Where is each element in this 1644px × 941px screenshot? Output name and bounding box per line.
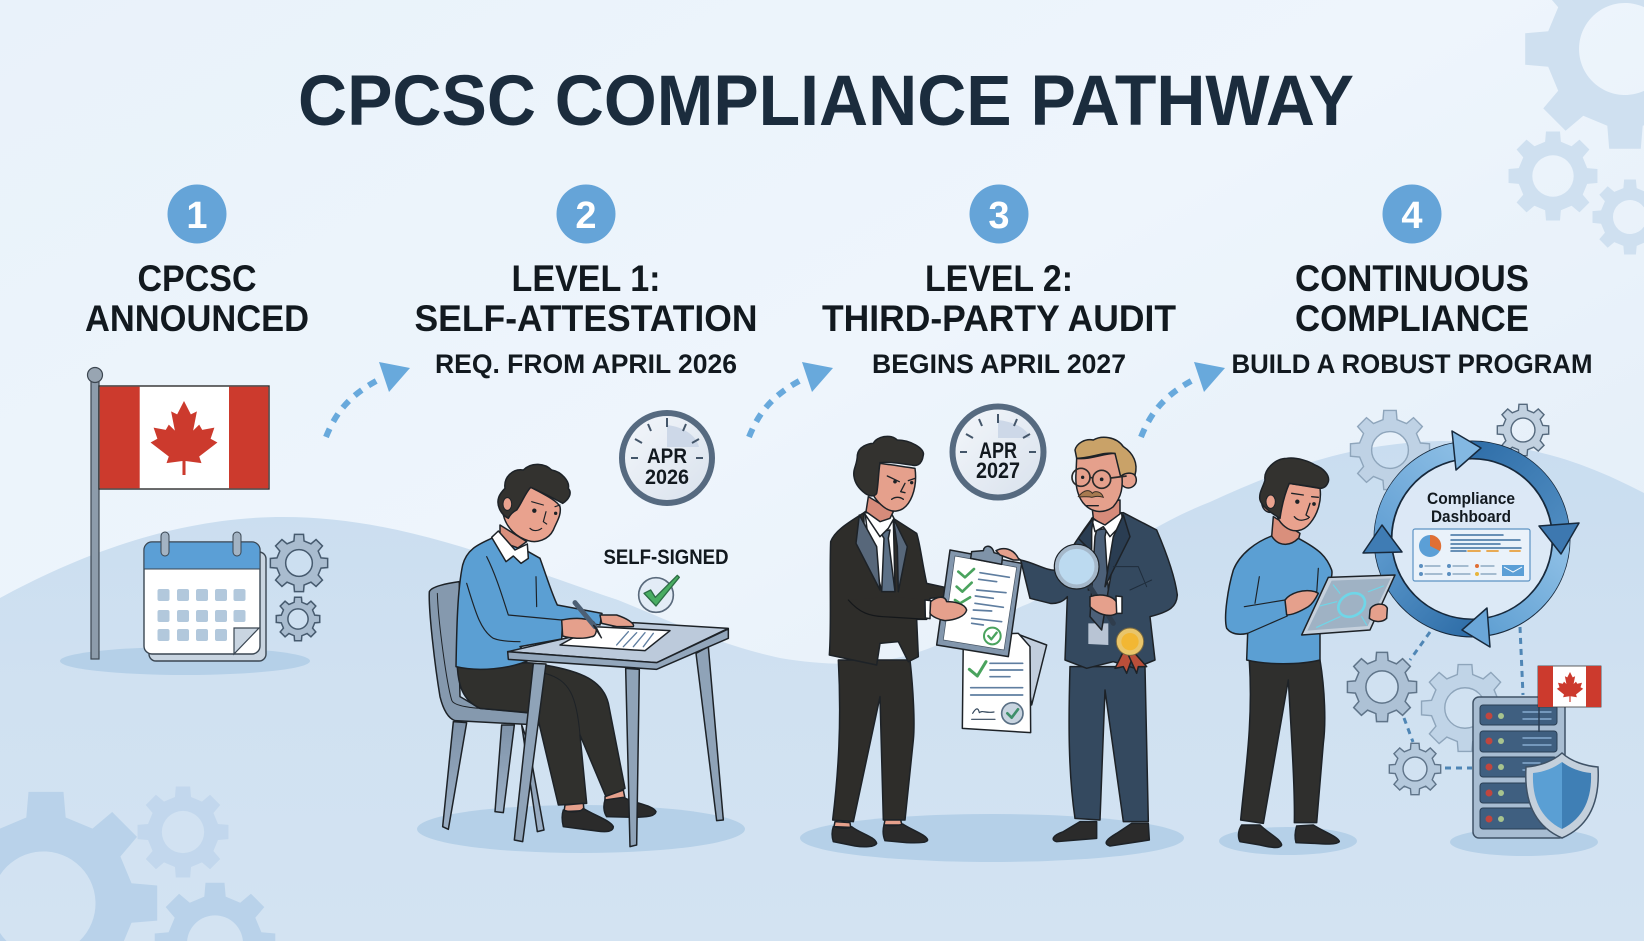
- signed document: [962, 633, 1047, 733]
- desk: [508, 623, 728, 847]
- auditor in navy suit: [1021, 437, 1177, 846]
- arrow: step 3 to step 4: [1141, 362, 1225, 437]
- panel: step 1 CPCSC announced: [60, 184, 328, 675]
- background gears: top right: [1509, 0, 1644, 254]
- panel: step 4 continuous compliance: [1219, 184, 1601, 856]
- icon: shield: [1526, 753, 1598, 838]
- compliance cycle arrows: [1363, 431, 1579, 647]
- label: compliance dashboard: Dashboard: [1431, 508, 1511, 526]
- step number 4: [1382, 184, 1442, 244]
- icon: clock April 2026: [622, 413, 712, 503]
- heading: level 1 self-attestation: SELF-ATTESTATION: [414, 298, 758, 339]
- background gears: bottom left: [0, 787, 275, 941]
- panel: step 3 third-party audit: [800, 184, 1184, 862]
- illustration: person signing at desk: [429, 464, 728, 847]
- icon: check mark: [639, 575, 679, 612]
- label: compliance dashboard: [1427, 490, 1515, 526]
- heading: level 2 third-party audit: THIRD-PARTY AUDIT: [822, 298, 1176, 339]
- tablet: [1302, 575, 1395, 635]
- heading: continuous compliance: COMPLIANCE: [1295, 298, 1529, 339]
- illustration: person with tablet: [1226, 458, 1395, 848]
- arrow: step 1 to step 2: [326, 362, 410, 437]
- icon: clock April 2027: 2027: [976, 458, 1020, 483]
- dashed connectors: [1404, 627, 1523, 768]
- title: CPCSC COMPLIANCE PATHWAY: [298, 62, 1354, 141]
- magnifier and hand: [1054, 544, 1122, 623]
- heading: continuous compliance: CONTINUOUS: [1295, 258, 1529, 299]
- pants: [1241, 660, 1325, 823]
- illustration: employee, auditor and documents: [829, 436, 1177, 847]
- heading: level 2 third-party audit: LEVEL 2:: [925, 258, 1073, 299]
- icon: clock April 2026: 2026: [645, 466, 689, 489]
- sweater: [456, 538, 602, 669]
- hands and pen: [562, 603, 634, 638]
- shadows under person and server: [1219, 827, 1598, 856]
- step number 3: 3: [988, 195, 1010, 237]
- hands holding clipboard: [925, 549, 1021, 621]
- employee in black suit: [829, 436, 945, 847]
- step number 2: [556, 184, 616, 244]
- server rack: [1473, 697, 1565, 838]
- icon: Canadian flag on server: [1538, 666, 1601, 732]
- shadow under flag and calendar: [60, 647, 310, 675]
- chair legs: [443, 722, 544, 832]
- ribbon badge: [1115, 628, 1147, 673]
- arrow: step 2 to step 3: [749, 362, 833, 437]
- shoes: [1238, 825, 1339, 848]
- gears behind cycle: [1347, 404, 1549, 795]
- icon: clock April 2027: APR: [979, 438, 1017, 463]
- background wave: [0, 441, 1644, 941]
- icon: calendar: [144, 532, 266, 661]
- heading: level 1 self-attestation: [414, 258, 758, 339]
- panel: step 2 self-attestation: [414, 184, 758, 853]
- head: [1260, 458, 1329, 531]
- shoes: [562, 790, 656, 832]
- pants: [457, 663, 625, 805]
- subheading: required from April 2026: REQ. FROM APRIL 2026: [435, 349, 737, 379]
- step number 3: [970, 184, 1028, 244]
- icon: clock April 2026: APR: [647, 445, 687, 468]
- heading: CPCSC announced: ANNOUNCED: [85, 298, 309, 339]
- heading: CPCSC announced: CPCSC: [138, 258, 256, 299]
- subheading: begins April 2027: BEGINS APRIL 2027: [872, 349, 1126, 379]
- label: self-signed: SELF-SIGNED: [604, 546, 728, 569]
- icon: clock April 2027: [952, 406, 1044, 498]
- heading: CPCSC announced: [85, 258, 309, 339]
- subheading: build a robust program: BUILD A ROBUST PROGRAM: [1232, 349, 1592, 379]
- clipboard checklist: [937, 546, 1022, 657]
- step number 4: 4: [1401, 195, 1423, 237]
- heading: level 2 third-party audit: [822, 258, 1176, 339]
- label: compliance dashboard: Compliance: [1427, 490, 1515, 508]
- head: [498, 464, 570, 542]
- shadow under auditors: [800, 814, 1184, 862]
- heading: level 1 self-attestation: LEVEL 1:: [512, 258, 660, 299]
- icon: small gears by calendar: [270, 534, 328, 641]
- dashboard panel: [1413, 529, 1530, 581]
- neck: [500, 525, 527, 550]
- paper: [560, 627, 670, 651]
- step number 2: 2: [575, 195, 597, 237]
- chair: [429, 582, 544, 725]
- shadow under desk: [417, 805, 745, 853]
- step number 1: 1: [186, 195, 208, 237]
- icon: Canadian flag on pole: [88, 368, 269, 659]
- step number 1: [168, 184, 226, 244]
- sweater: [1226, 517, 1332, 664]
- heading: continuous compliance: [1295, 258, 1529, 339]
- collar: [492, 531, 528, 563]
- hands: [1285, 591, 1387, 621]
